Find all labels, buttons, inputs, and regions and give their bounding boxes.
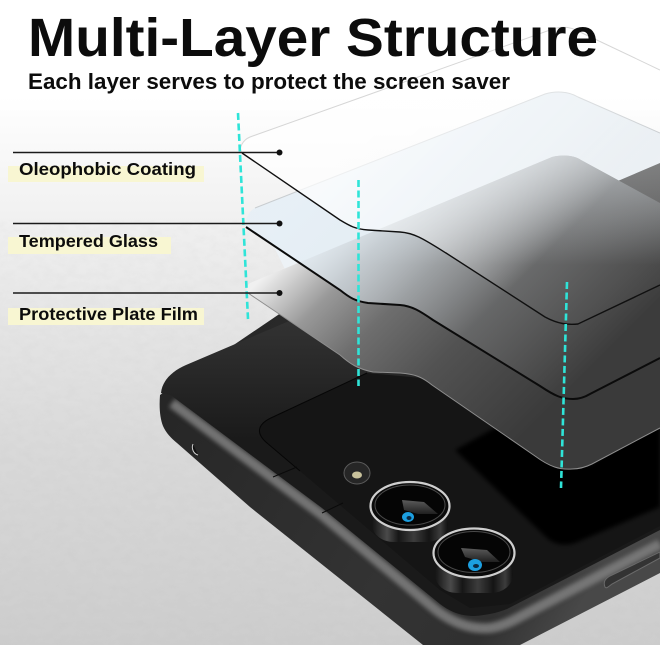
camera island [259,373,660,608]
tempered glass front edge [246,227,660,399]
label: oleophobic coating: Oleophobic Coating [19,159,196,179]
layer: oleophobic coating [241,27,660,324]
layer: protective plate film [247,156,660,469]
phone side frame [160,300,660,645]
side button [604,552,660,588]
lens 2 [434,528,514,593]
camera island edge [259,373,367,471]
flash [344,462,370,484]
phone body [160,163,660,645]
seam lines [273,467,343,513]
label: protective plate film: Protective Plate Film [19,304,198,324]
headphone hole [192,444,198,455]
frame highlight [172,403,660,628]
film top fade [250,156,660,300]
tempered glass backing tint [255,92,660,300]
oleophobic front edge [242,153,660,324]
label: tempered glass [8,220,282,254]
cyan dashed guide lines [238,113,567,488]
concrete texture [0,220,660,645]
black shadow area [455,415,660,545]
phone back surface [161,163,660,616]
title: Multi-Layer Structure [28,8,598,68]
label: oleophobic coating [8,150,282,182]
lens 1 [370,482,450,542]
layer: tempered glass [246,92,660,399]
label: protective plate film [8,290,282,325]
subtitle: Each layer serves to protect the screen saver [28,69,510,94]
film front edge [248,293,660,469]
label: tempered glass: Tempered Glass [19,231,158,251]
